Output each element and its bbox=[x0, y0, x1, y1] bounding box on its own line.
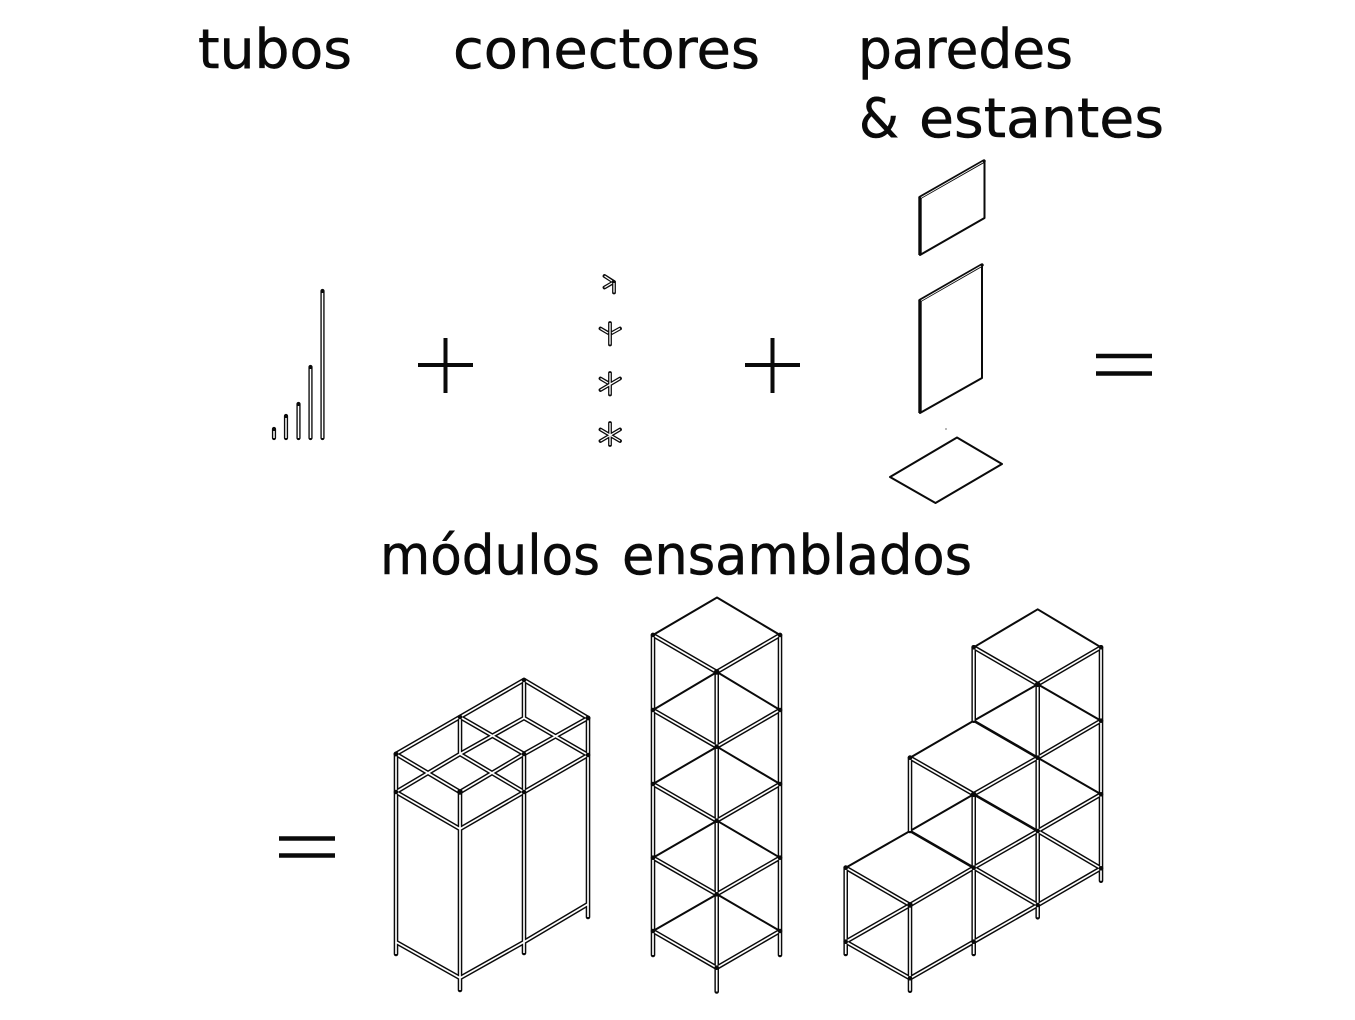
connector: six-way bbox=[600, 423, 620, 445]
heading: módulos ensamblados: ensamblados bbox=[622, 524, 972, 587]
module: five-level tower bbox=[651, 598, 782, 992]
equals sign 1 bbox=[1096, 356, 1152, 374]
icon: small wall panel bbox=[920, 161, 984, 255]
heading: paredes & estantes bbox=[858, 18, 1164, 150]
connector: three-way bbox=[600, 323, 620, 344]
equals sign 2 bbox=[279, 838, 335, 856]
connector: two-way bbox=[604, 276, 614, 292]
connector: four-way bbox=[600, 373, 620, 394]
heading: paredes & estantes: paredes bbox=[858, 18, 1073, 81]
plus sign 1 bbox=[418, 338, 473, 393]
icon: four connectors bbox=[600, 276, 620, 445]
icon: five tubes of increasing length bbox=[274, 291, 322, 438]
plus sign 2 bbox=[745, 338, 800, 393]
heading: módulos ensamblados bbox=[380, 524, 972, 587]
heading: módulos ensamblados: módulos bbox=[380, 524, 600, 587]
module: closed wardrobe bbox=[394, 678, 590, 990]
icon: shelf panel bbox=[890, 428, 1002, 503]
heading: paredes & estantes: estantes bbox=[919, 87, 1164, 150]
heading: paredes & estantes: & bbox=[859, 87, 899, 150]
icon: tall wall panel bbox=[920, 265, 982, 413]
heading: tubos: tubos bbox=[198, 18, 352, 81]
heading: conectores: conectores bbox=[453, 18, 760, 81]
module: stepped shelving bbox=[843, 609, 1103, 991]
